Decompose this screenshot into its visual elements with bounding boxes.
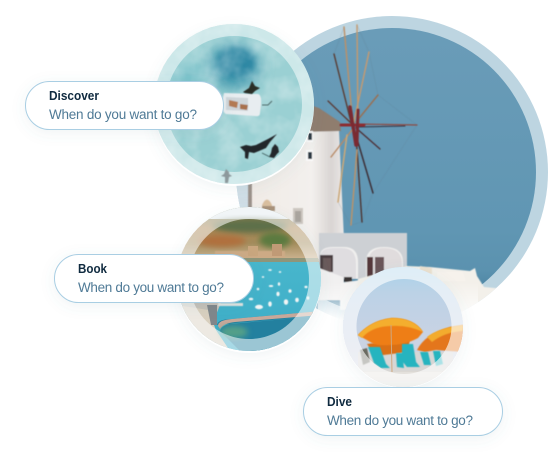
circle shadow (343, 268, 463, 388)
callout: Discover (26, 82, 224, 130)
white fade at base of photo (300, 243, 549, 463)
heading: Dive: Dive (327, 395, 352, 409)
white buildings and arches (318, 232, 496, 312)
translucent ring (343, 267, 463, 387)
windmill tower (236, 105, 344, 300)
boats (218, 269, 309, 309)
ocean aerial photo (154, 24, 314, 184)
manta ray (243, 81, 260, 94)
callout: Book (54, 254, 254, 302)
faded shark on ring (221, 169, 232, 183)
panel: Book photo circle (177, 207, 321, 353)
far umbrella (417, 325, 463, 352)
callout: Dive (304, 388, 502, 436)
pill background (26, 82, 224, 130)
text: Book question: When do you want to go? (78, 280, 224, 295)
text: Dive question: When do you want to go? (327, 413, 473, 428)
heading: Book: Book (78, 262, 107, 276)
translucent ring (177, 207, 321, 351)
panel: windmill photo circle (236, 16, 548, 320)
pill background (304, 388, 502, 436)
circle shadow (154, 26, 314, 186)
floating lounge boat (222, 93, 272, 116)
text: Discover question: When do you want to go? (49, 107, 197, 122)
circle shadow (177, 209, 321, 353)
panel: Dive photo circle (343, 267, 463, 389)
pill background (54, 254, 254, 302)
sky and sea background (236, 16, 549, 328)
near umbrella (366, 341, 410, 356)
beach umbrella photo (343, 267, 463, 389)
translucent ring (154, 24, 314, 184)
heading: Discover: Discover (49, 89, 99, 103)
windmill sails (328, 25, 417, 225)
turquoise sun loungers (368, 344, 443, 368)
harbour aerial photo (177, 207, 321, 352)
panel: Discover photo circle (154, 24, 314, 186)
sharks (240, 134, 279, 159)
